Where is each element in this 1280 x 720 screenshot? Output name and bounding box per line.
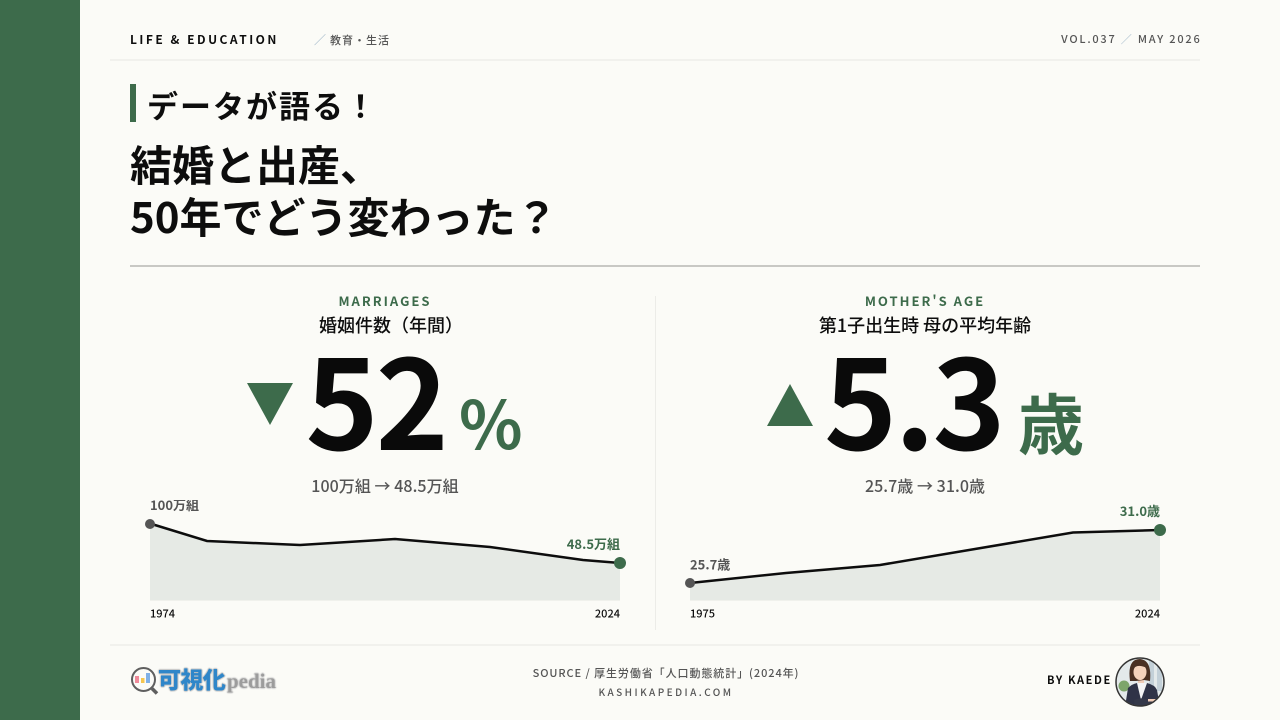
area line chart: 2024 xyxy=(1135,606,1160,622)
big number: 5.3 xyxy=(824,306,1003,486)
main title: 結婚と出産、 xyxy=(130,133,382,194)
panel label: MARRIAGES xyxy=(338,291,432,310)
icon: author avatar xyxy=(1115,657,1165,707)
big number: 52 xyxy=(306,306,446,486)
area line chart: 48.5万組 xyxy=(567,534,620,553)
kicker heading: データが語る！ xyxy=(147,82,378,126)
panel heading: 婚姻件数（年間） xyxy=(319,312,463,338)
panel label: MOTHER'S AGE xyxy=(865,291,985,310)
category label: LIFE & EDUCATION xyxy=(130,31,279,48)
left green band xyxy=(0,0,80,720)
sub category: ／ 教育・生活 xyxy=(314,31,390,48)
change note: 100万組 → 48.5万組 xyxy=(311,473,459,497)
header bar xyxy=(110,20,1200,61)
panel heading: 第1子出生時 母の平均年齢 xyxy=(819,312,1031,338)
icon: down triangle xyxy=(247,383,293,425)
logo wordmark: 可視化 xyxy=(158,661,225,695)
main title xyxy=(130,133,558,246)
footer rule xyxy=(110,644,1200,646)
website: KASHIKAPEDIA.COM xyxy=(598,684,734,699)
logo xyxy=(131,661,277,695)
main title: 50年でどう変わった？ xyxy=(130,185,558,246)
area line chart: 31.0歳 xyxy=(1120,501,1160,520)
unit: 歳 xyxy=(1018,373,1084,469)
section rule xyxy=(130,265,1200,267)
icon: magnifier with bars xyxy=(131,667,158,695)
source text: SOURCE / 厚生労働省「人口動態統計」(2024年) xyxy=(533,665,799,681)
title block xyxy=(130,82,558,246)
area line chart: 1974 xyxy=(150,606,175,622)
area line chart: 2024 xyxy=(595,606,620,622)
area line chart: 1975 xyxy=(690,606,715,622)
panel divider xyxy=(655,296,656,630)
change note: 25.7歳 → 31.0歳 xyxy=(865,473,985,497)
issue label: VOL.037 ／ MAY 2026 xyxy=(1061,31,1202,47)
area line chart xyxy=(685,501,1166,622)
panel: marriages xyxy=(145,291,626,622)
unit: % xyxy=(459,373,523,469)
title accent bar xyxy=(130,84,136,122)
byline: BY KAEDE xyxy=(1047,672,1112,688)
area line chart xyxy=(145,500,626,622)
icon: up triangle xyxy=(767,384,813,426)
panel: mother's age xyxy=(685,291,1166,622)
area line chart: 25.7歳 xyxy=(690,554,730,574)
logo suffix: pedia xyxy=(227,669,276,693)
